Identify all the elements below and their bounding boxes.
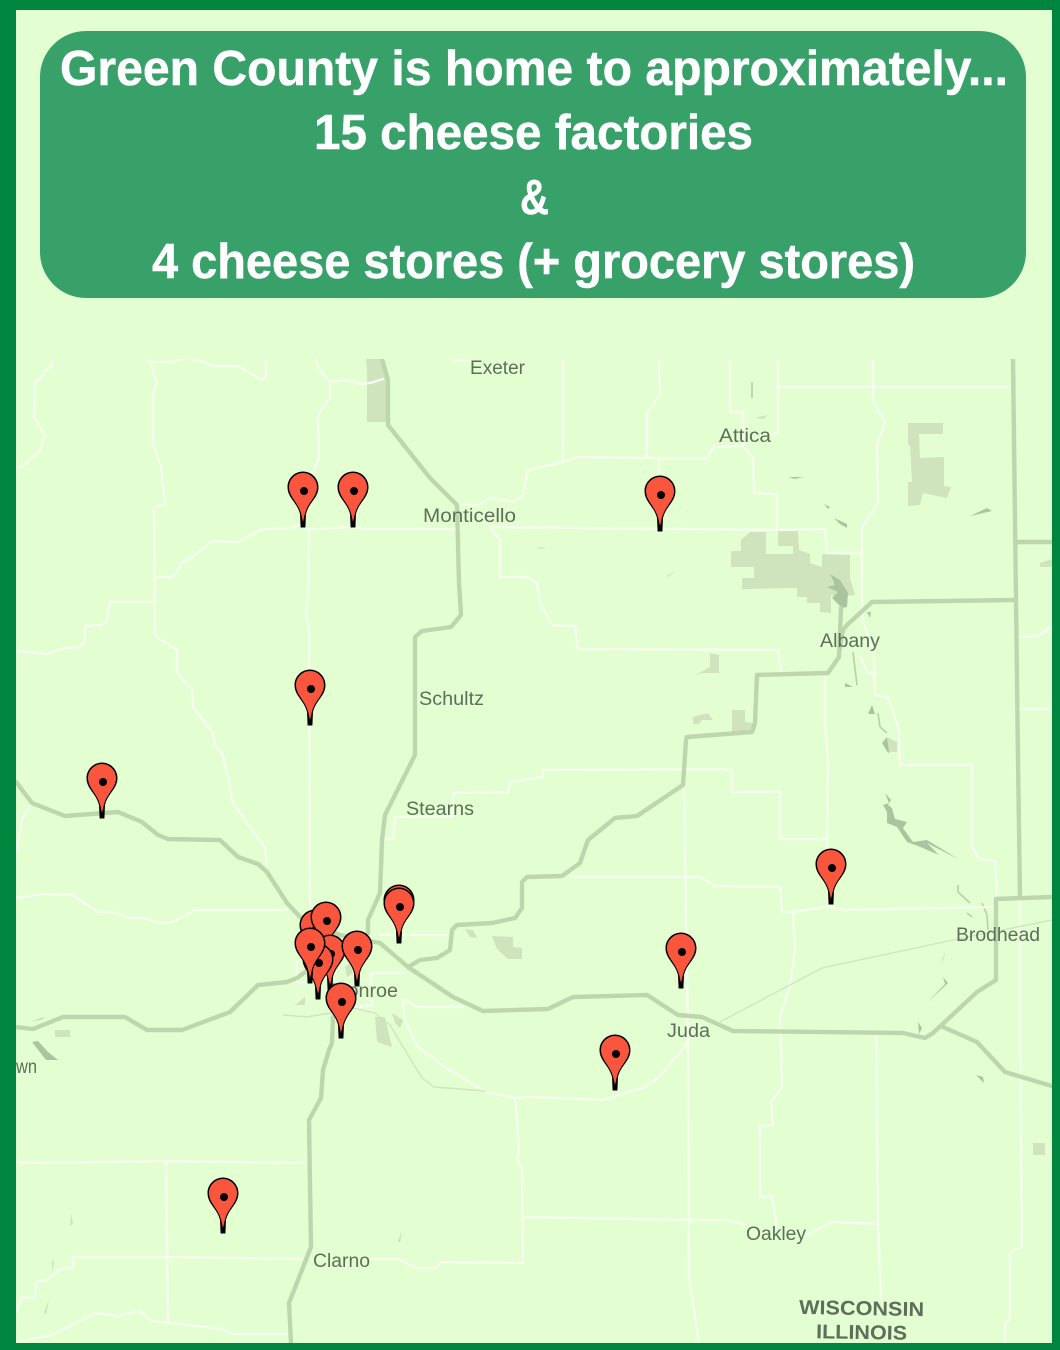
pin: east of Monticello [644,476,676,532]
pin: Monroe east [342,930,372,986]
map pins [86,472,846,1234]
pin: northeast Monroe rear [384,884,414,940]
label: partial town name at left edge: wn [15,1057,37,1078]
map: minor roads [16,359,1052,1343]
label: Exeter: Exeter [470,358,526,379]
pin: far west [86,762,118,818]
label: Stearns: Stearns [406,799,474,820]
label: Illinois: ILLINOIS [816,1321,907,1345]
heading line 3: & [520,171,549,225]
pin: north of Monroe [294,670,326,726]
label: Monticello: Monticello [423,506,516,527]
pin: northeast Monroe front [384,888,414,944]
pin: east near Brodhead [816,848,846,904]
title panel [40,31,1026,298]
map: place labels [15,358,1040,1345]
map: highways [16,359,1052,1343]
label: Juda: Juda [667,1021,710,1042]
heading line 2: 15 cheese factories [314,106,753,160]
heading line 4: 4 cheese stores (+ grocery stores) [152,235,915,289]
label: Clarno: Clarno [313,1251,370,1272]
label: Wisconsin: WISCONSIN [799,1297,924,1321]
pin: northwest 2 [338,472,368,528]
pin: northwest 1 [288,472,318,528]
pin: Monroe cluster center [302,944,334,1000]
label: Oakley: Oakley [746,1224,807,1245]
pin: west of Juda [600,1034,630,1090]
label: Brodhead: Brodhead [956,925,1040,946]
pin: Monroe cluster back [300,910,314,931]
pin: southwest [208,1178,238,1234]
pin: Monroe south [326,982,356,1038]
heading line 1: Green County is home to approximately... [60,42,1008,96]
label: Schultz: Schultz [419,689,484,710]
pin: north of Juda [666,932,696,988]
label: Attica: Attica [719,426,771,447]
label: Albany: Albany [820,631,881,652]
pin: Monroe cluster rear right [324,934,344,990]
pin: Monroe cluster left [294,928,326,984]
label: Monroe: Monroe [331,981,398,1002]
map of Green County [15,358,1052,1345]
map: parks and water [30,359,1052,1315]
pin: Monroe cluster top [310,902,342,936]
